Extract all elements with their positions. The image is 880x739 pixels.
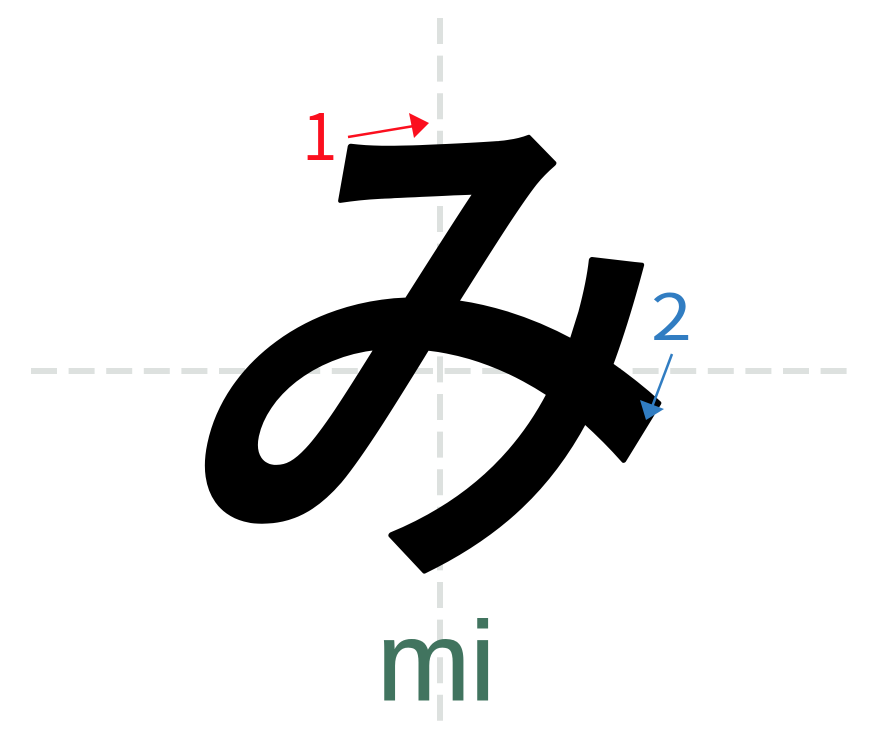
romanization: mi: mi — [377, 599, 495, 724]
arrow: stroke 2 direction — [640, 354, 672, 420]
arrow: stroke 1 direction — [348, 113, 429, 138]
stroke number 1: 1 — [302, 87, 338, 179]
stroke number 2: 2 — [651, 266, 692, 359]
hiragana character: み — [135, 63, 754, 649]
